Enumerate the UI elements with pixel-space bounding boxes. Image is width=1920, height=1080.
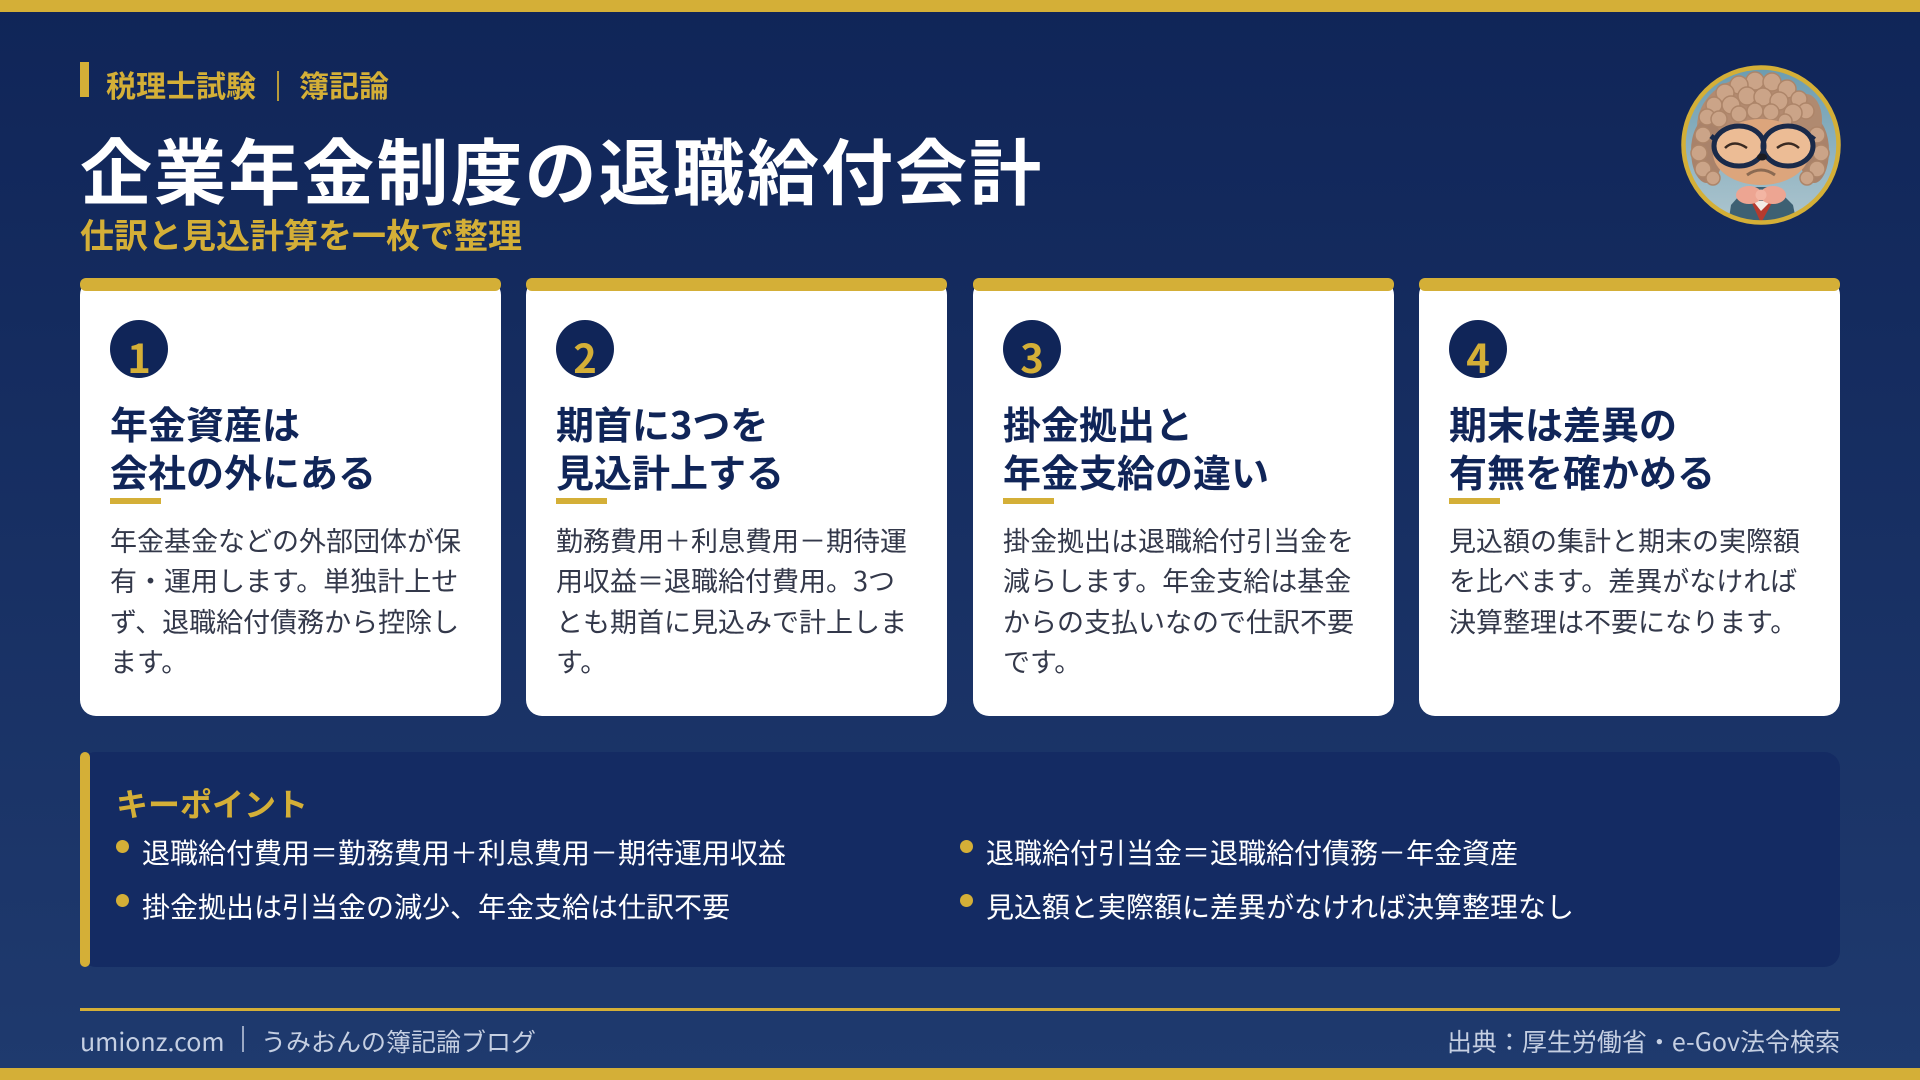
key points heading: キーポイント xyxy=(116,780,308,826)
category divider xyxy=(277,71,279,101)
card 3 body: からの支払いなので仕訳不要 xyxy=(1003,601,1354,640)
card 2 body: す。 xyxy=(556,641,607,680)
card 2 underline xyxy=(556,498,607,504)
card 2 top bar xyxy=(526,278,947,291)
footer left text xyxy=(80,1023,536,1059)
panel: card 1 xyxy=(80,279,501,716)
card 2 body: 勤務費用＋利息費用－期待運 xyxy=(556,520,907,559)
key points accent bar xyxy=(80,752,90,967)
card 2 number xyxy=(556,320,614,378)
card 4 heading: 期末は差異の xyxy=(1449,395,1677,450)
panel: key points xyxy=(80,752,1840,967)
card 3 underline xyxy=(1003,498,1054,504)
card 3 number xyxy=(1003,320,1061,378)
card 1 number xyxy=(110,320,168,378)
card 3 heading xyxy=(1003,395,1269,498)
card 3 heading: 年金支給の違い xyxy=(1003,443,1269,498)
card 1 body xyxy=(110,520,461,680)
icon: avatar xyxy=(1681,65,1841,225)
card 1 top bar xyxy=(80,278,501,291)
card 3 body: 減らします。年金支給は基金 xyxy=(1003,560,1351,599)
card 1 heading xyxy=(110,395,376,498)
card 2 body: 用収益＝退職給付費用。3つ xyxy=(556,560,895,599)
subtitle: 仕訳と見込計算を一枚で整理 xyxy=(80,209,522,258)
card 2 heading xyxy=(556,395,784,498)
footer right text: 出典：厚生労働省・e-Gov法令検索 xyxy=(1447,1023,1840,1059)
card 4 body xyxy=(1449,520,1800,640)
card 3 body: 掛金拠出は退職給付引当金を xyxy=(1003,520,1354,559)
panel: card 4 xyxy=(1419,279,1840,716)
footer blog name: うみおんの簿記論ブログ xyxy=(261,1023,536,1059)
bullet 1: 退職給付費用＝勤務費用＋利息費用－期待運用収益 xyxy=(142,832,786,872)
footer rule xyxy=(80,1008,1840,1011)
bullet 4: 見込額と実際額に差異がなければ決算整理なし xyxy=(986,886,1574,926)
accent tick xyxy=(80,62,89,97)
footer left text: umionz.com xyxy=(80,1023,225,1059)
card 1 underline xyxy=(110,498,161,504)
card 3 heading: 掛金拠出と xyxy=(1003,395,1193,450)
category text: 税理士試験 xyxy=(106,62,256,106)
card 1 heading: 年金資産は xyxy=(110,395,300,450)
top bar xyxy=(0,0,1920,12)
card 2 heading: 期首に3つを xyxy=(556,395,768,450)
bullet 2: 掛金拠出は引当金の減少、年金支給は仕訳不要 xyxy=(142,886,730,926)
footer divider xyxy=(242,1026,244,1052)
card 4 heading xyxy=(1449,395,1715,498)
bottom bar xyxy=(0,1068,1920,1080)
card 4 underline xyxy=(1449,498,1500,504)
card 4 top bar xyxy=(1419,278,1840,291)
card 4 heading: 有無を確かめる xyxy=(1449,443,1715,498)
card 2 heading: 見込計上する xyxy=(556,443,784,498)
card 3 body: です。 xyxy=(1003,641,1081,680)
card 2 body: とも期首に見込みで計上しま xyxy=(556,601,907,640)
card 1 body: ます。 xyxy=(110,641,188,680)
card 2 body xyxy=(556,520,907,680)
card 4 body: を比べます。差異がなければ xyxy=(1449,560,1797,599)
subject text: 簿記論 xyxy=(299,62,389,106)
card 3 body xyxy=(1003,520,1354,680)
bullet 3: 退職給付引当金＝退職給付債務－年金資産 xyxy=(986,832,1518,872)
card 1 body: 年金基金などの外部団体が保 xyxy=(110,520,461,559)
card 1 body: ず、退職給付債務から控除し xyxy=(110,601,459,640)
card 4 body: 見込額の集計と期末の実際額 xyxy=(1449,520,1800,559)
card 4 number xyxy=(1449,320,1507,378)
card 3 top bar xyxy=(973,278,1394,291)
category label xyxy=(80,62,389,106)
card 1 heading: 会社の外にある xyxy=(110,443,376,498)
panel: card 2 xyxy=(526,279,947,716)
card 1 body: 有・運用します。単独計上せ xyxy=(110,560,458,599)
card 4 body: 決算整理は不要になります。 xyxy=(1449,601,1797,640)
title: 企業年金制度の退職給付会計 xyxy=(80,115,1043,220)
panel: card 3 xyxy=(973,279,1394,716)
